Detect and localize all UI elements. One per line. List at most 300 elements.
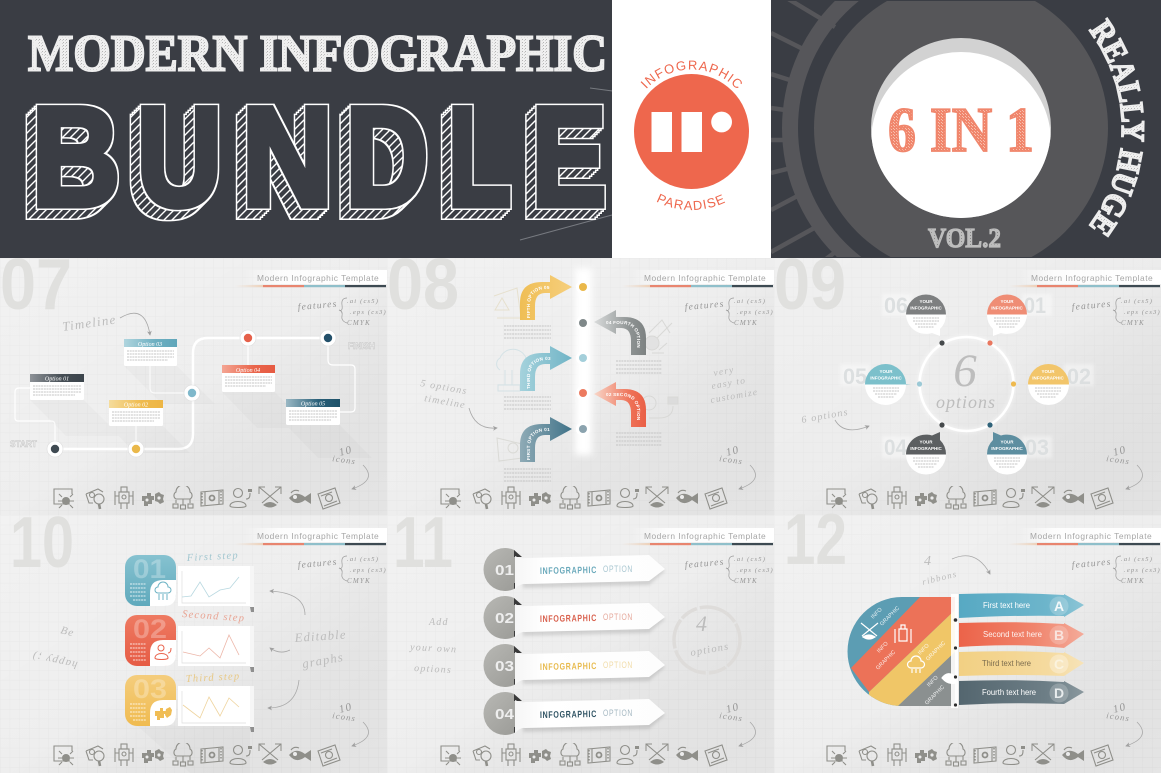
- icon row: [54, 485, 340, 509]
- note: graphs: graphs: [301, 650, 345, 671]
- long shadow: [125, 715, 250, 773]
- bubble: 01: YOUR: [1000, 299, 1014, 304]
- node: option 01: [576, 422, 590, 436]
- label: finish: FINISH: [348, 341, 375, 351]
- features note: .ai (cs5): [1121, 556, 1153, 563]
- option 01: OPTION: [603, 564, 633, 575]
- step 3 graph: [178, 686, 254, 732]
- features note: features: [297, 299, 338, 313]
- panel: 11 four options: [387, 503, 774, 773]
- icon: photo: [318, 745, 340, 766]
- outer ring: [782, 1, 861, 257]
- label: vol 2: VOL.2: [928, 223, 1001, 253]
- heading: bundle letters: [32, 78, 606, 235]
- features note: [684, 556, 774, 585]
- icon: crossed arrows: [259, 487, 281, 508]
- option 02: [484, 596, 665, 639]
- white divider: [951, 594, 958, 708]
- heading: bundle letters: L: [448, 78, 511, 235]
- icon: cloud network: [173, 485, 193, 509]
- note: add your own options: Add: [428, 617, 449, 628]
- step 2 card: 02: [133, 614, 167, 644]
- header: [622, 528, 774, 545]
- bubble: 05: YOUR: [879, 369, 893, 374]
- stamp: 4 options: options: [690, 641, 730, 659]
- ring text: options: options: [936, 392, 996, 412]
- icon: fish: [289, 747, 311, 761]
- note: 10 icons: [719, 701, 744, 723]
- rays: [771, 0, 838, 262]
- text placeholder blocks: [504, 326, 662, 481]
- bubble: 04: YOUR: [919, 440, 933, 444]
- arrow: to icons: [1126, 722, 1142, 746]
- header: [1009, 270, 1161, 287]
- ribbon D: Fourth text here: [982, 688, 1036, 697]
- note: 10 icons: [1106, 444, 1131, 466]
- icon: photo: [705, 745, 727, 766]
- card: option 05: [286, 399, 340, 425]
- ribbon D: [959, 680, 1084, 705]
- step 1 card: [125, 554, 176, 606]
- slide number: 10: [10, 503, 74, 583]
- note: 4 ribbons: ribbons: [921, 569, 958, 587]
- icon: robot: [888, 487, 906, 509]
- note: 5 options timeline: [419, 378, 468, 411]
- icon: robot: [115, 744, 133, 766]
- icon: crossed arrows: [646, 744, 668, 764]
- note: timeline: Timeline: [61, 312, 117, 334]
- segment labels: GRAPHIC: [879, 605, 901, 627]
- arrow: graph 3: [268, 680, 299, 708]
- node: option 04: [576, 316, 590, 330]
- heading: bundle letters: D: [346, 78, 428, 235]
- icon: person plug: [1003, 488, 1025, 508]
- option 04: [484, 692, 665, 735]
- icon row: [54, 742, 340, 766]
- header: [235, 528, 387, 545]
- option 03: INFOGRAPHIC: [540, 661, 597, 673]
- step 3 card: [125, 674, 176, 726]
- note: happy: happy ;): [31, 649, 79, 671]
- icon: person plug: [617, 488, 639, 508]
- icon: crossed arrows: [1032, 487, 1054, 508]
- label: first step: First step: [186, 550, 239, 564]
- option 04: INFOGRAPHIC: [540, 709, 597, 721]
- icon: film: [588, 490, 610, 506]
- option 04: OPTION: [603, 708, 633, 719]
- segment labels: INFO: [870, 606, 884, 620]
- features note: [1071, 556, 1161, 585]
- note: editable: Editable: [293, 627, 347, 645]
- icon: cloud network: [560, 742, 580, 766]
- header: [235, 270, 387, 287]
- node: option 05: [576, 280, 590, 294]
- note: 10 icons: [332, 444, 357, 466]
- arrow: fifth option: FIFTH OPTION 05: [526, 286, 550, 318]
- option 01: [484, 548, 665, 591]
- features note: .ai (cs5): [734, 298, 766, 305]
- features note: .eps (cs3): [350, 309, 387, 316]
- stamp: 4 options: 4: [696, 611, 708, 636]
- segment labels: GRAPHIC: [924, 684, 946, 706]
- header: Modern Infographic Template: [1030, 531, 1153, 541]
- icon: spider screen: [827, 489, 847, 508]
- note: add your own options: your own: [409, 642, 457, 655]
- slide number: 09: [774, 245, 846, 325]
- card: option 03: [124, 339, 177, 366]
- icon: film: [201, 747, 223, 763]
- bubble: 01: 01: [1024, 293, 1046, 318]
- icon: person plug: [230, 746, 252, 764]
- ribbon D: D: [1054, 685, 1064, 701]
- ribbon B: Second text here: [983, 630, 1042, 639]
- icon: fish: [1062, 490, 1084, 504]
- segment labels: GRAPHIC: [925, 640, 947, 662]
- timeline path: [15, 338, 355, 449]
- segment labels: INFO: [926, 674, 940, 688]
- features note: .eps (cs3): [1124, 309, 1161, 316]
- note: 10 icons: icons: [332, 710, 357, 723]
- features note: CMYK: [734, 319, 758, 327]
- panel: 08 arrows: [387, 245, 774, 515]
- features note: .eps (cs3): [737, 309, 774, 316]
- arrow: timeline: [120, 313, 150, 335]
- features note: features: [1071, 299, 1112, 313]
- icon: camera: [859, 489, 877, 509]
- arrow: third option: THIRD OPTION 03: [526, 356, 550, 389]
- icon: photo: [318, 488, 340, 509]
- note: add your own options: options: [414, 663, 452, 676]
- bubble: 04: 04: [884, 435, 908, 460]
- features note: .ai (cs5): [1121, 298, 1153, 305]
- ribbon C: [959, 651, 1084, 676]
- icon: spider screen: [54, 746, 74, 765]
- icon: puzzle: [529, 749, 551, 763]
- ribbon A: [959, 593, 1084, 618]
- heading: bundle letters: U: [137, 78, 222, 235]
- ring text: 6: 6: [953, 345, 977, 397]
- note: 10 icons: 10: [1112, 444, 1128, 459]
- note: 6 options: 6 options: [801, 407, 850, 426]
- ribbon C: C: [1054, 656, 1064, 672]
- bubble: 06: 06: [884, 293, 908, 318]
- features note: .ai (cs5): [347, 298, 379, 305]
- long shadows: [30, 366, 372, 458]
- bubble: 03: [987, 432, 1052, 474]
- ring nodes: [917, 340, 1016, 428]
- arrow: graph 1: [270, 591, 305, 615]
- icon: puzzle: [142, 749, 164, 763]
- arrow: ribbons: [952, 556, 990, 574]
- icon row: [827, 485, 1113, 509]
- option 01: INFOGRAPHIC: [540, 565, 597, 577]
- arrow: second option: 02 SECOND OPTION: [606, 392, 640, 420]
- header: Modern Infographic Template: [644, 531, 767, 541]
- note: 10 icons: [332, 701, 357, 723]
- panel: 10 steps with graphs: [0, 503, 387, 773]
- features note: features: [684, 299, 725, 313]
- arrow: to icons: [352, 465, 368, 489]
- node: option 02: [576, 386, 590, 400]
- panel: 07 timeline: [0, 245, 387, 515]
- arrow: third option: [520, 346, 572, 391]
- icon: photo: [705, 488, 727, 509]
- icon: camera: [86, 489, 104, 509]
- note: 10 icons: icons: [332, 453, 357, 466]
- icon: spider screen: [441, 746, 461, 765]
- icon: film: [974, 747, 996, 763]
- step 3 card: 03: [133, 674, 167, 704]
- hole with crescent: [871, 38, 1051, 232]
- icon row: [827, 742, 1113, 766]
- icon: fish: [289, 490, 311, 504]
- inner ring: [814, 0, 1108, 275]
- features note: .eps (cs3): [350, 567, 387, 574]
- icon: puzzle: [915, 749, 937, 763]
- pill chart: [848, 597, 955, 706]
- features note: features: [684, 557, 725, 571]
- icon: spider screen: [441, 489, 461, 508]
- bubble: 01: [987, 293, 1052, 336]
- icon row: [441, 485, 727, 509]
- arrow: to icons: [1126, 465, 1142, 489]
- features note: CMYK: [734, 577, 758, 585]
- icon: photo: [1091, 488, 1113, 509]
- card: option 04: Option 04: [236, 367, 260, 374]
- arrow: 6 options: [835, 420, 869, 430]
- slide number: 11: [393, 503, 453, 583]
- panel: brand logo: [612, 0, 771, 258]
- icon: person plug: [230, 488, 252, 508]
- features note: features: [1071, 557, 1112, 571]
- features note: .ai (cs5): [347, 556, 379, 563]
- ribbon A: First text here: [983, 601, 1030, 610]
- ribbon A: A: [1054, 598, 1064, 614]
- heading: bundle letters: N: [242, 78, 333, 235]
- stamp: 4 options: [674, 607, 740, 673]
- icon: puzzle: [529, 492, 551, 506]
- step 1 graph: [178, 566, 254, 612]
- icon: cloud network: [173, 742, 193, 766]
- icon: person plug: [617, 746, 639, 764]
- header: [622, 270, 774, 287]
- arrow: to icons: [739, 465, 755, 489]
- arrow: first option: FIRST OPTION 01: [526, 428, 550, 460]
- curved text: really huge: REALLY HUGE: [1088, 17, 1145, 238]
- option 04: 04: [495, 706, 515, 723]
- features note: CMYK: [347, 577, 371, 585]
- logo text: paradise: PARADISE: [656, 194, 725, 210]
- header: Modern Infographic Template: [644, 273, 767, 283]
- logo text: infographic: INFOGRAPHIC: [640, 60, 742, 88]
- bubble: 05: INFOGRAPHIC: [870, 376, 903, 380]
- label: second step: Second step: [182, 609, 245, 624]
- note: easy to customize: customize: [710, 388, 759, 406]
- bubble: 05: 05: [843, 364, 867, 389]
- step 2 graph: [178, 626, 254, 672]
- header: Modern Infographic Template: [257, 531, 380, 541]
- icon: spider screen: [54, 489, 74, 508]
- option 03: 03: [495, 658, 514, 675]
- features note: features: [297, 557, 338, 571]
- bubble: 04: INFOGRAPHIC: [910, 446, 943, 451]
- bubble: 02: [1020, 364, 1094, 405]
- bubble: 06: INFOGRAPHIC: [910, 306, 943, 310]
- icon: cloud network: [946, 742, 966, 766]
- panel: 12 ribbons: [774, 500, 1161, 773]
- bubble: 02: YOUR: [1041, 369, 1055, 374]
- note: 10 icons: icons: [1106, 710, 1131, 723]
- note: easy to customize: easy to: [711, 376, 747, 392]
- icon: robot: [115, 487, 133, 509]
- arrow: fourth option: [594, 310, 646, 355]
- option 03: [484, 644, 665, 687]
- icon: puzzle: [142, 492, 164, 506]
- note: 10 icons: 10: [725, 444, 741, 459]
- note: 10 icons: [719, 444, 744, 466]
- panel: 09 six options: [774, 245, 1161, 515]
- option 01: 01: [495, 562, 514, 579]
- note: 10 icons: icons: [719, 710, 744, 723]
- icon: robot: [502, 744, 520, 766]
- bubble: 03: YOUR: [1000, 440, 1014, 444]
- bubble: 02: INFOGRAPHIC: [1032, 376, 1065, 380]
- step 1 card: 01: [133, 554, 166, 584]
- icon: person plug: [1003, 746, 1025, 764]
- header: [1009, 528, 1161, 545]
- faint icon: triangle sketch: [494, 288, 521, 318]
- icon row: [441, 742, 727, 766]
- node: option 03: [184, 385, 200, 401]
- node: option 02: [128, 441, 144, 457]
- icon: crossed arrows: [646, 487, 668, 508]
- card: option 01: [30, 374, 84, 400]
- option 02: INFOGRAPHIC: [540, 613, 597, 625]
- icon: camera: [473, 489, 491, 509]
- icon: fish: [1062, 747, 1084, 761]
- panel: title banner: [0, 0, 620, 258]
- note: easy to customize: very: [713, 365, 735, 379]
- note: 10 icons: 10: [338, 701, 354, 716]
- icon: puzzle: [915, 492, 937, 506]
- ribbon C: Third text here: [982, 659, 1031, 668]
- features note: .eps (cs3): [1124, 567, 1161, 574]
- arrow: second option: [594, 382, 646, 427]
- icon: robot: [888, 744, 906, 766]
- icon: fish: [676, 490, 698, 504]
- arrow: fourth option: 04 FOURTH OPTION: [606, 320, 640, 348]
- badge text: 6 in 1: 6 IN 1: [888, 95, 1034, 165]
- note: 10 icons: 10: [725, 701, 741, 716]
- card: option 04: [222, 365, 275, 392]
- heading: bundle letters: E: [532, 78, 606, 235]
- arrow: to icons: [739, 722, 755, 746]
- note: 10 icons: 10: [1112, 701, 1128, 716]
- arrow: graph 2: [270, 648, 290, 652]
- bubble: 04: [882, 432, 946, 474]
- note: 10 icons: [1106, 701, 1131, 723]
- features note: .ai (cs5): [734, 556, 766, 563]
- bubble: 03: 03: [1025, 435, 1049, 460]
- note: add your own options: [409, 617, 457, 676]
- icon: photo: [1091, 745, 1113, 766]
- ribbon B: [959, 622, 1084, 648]
- note: 10 icons: icons: [1106, 453, 1131, 466]
- features note: [297, 556, 387, 585]
- arrow: fifth option: [520, 275, 572, 320]
- logo disc: [634, 74, 749, 189]
- icon: film: [588, 747, 610, 763]
- icon: cloud network: [560, 485, 580, 509]
- ribbon pins: [954, 618, 957, 707]
- bubble: 06: [882, 293, 946, 336]
- header: Modern Infographic Template: [257, 273, 380, 283]
- icon: crossed arrows: [259, 744, 281, 764]
- icon: camera: [859, 746, 877, 766]
- node: finish: [320, 330, 336, 346]
- features note: CMYK: [1121, 577, 1145, 585]
- bubble: 02: 02: [1067, 364, 1091, 389]
- faint icon: plug: [642, 396, 678, 418]
- title: modern infographic: MODERN INFOGRAPHIC: [28, 26, 607, 82]
- features note: CMYK: [347, 319, 371, 327]
- icon: film: [201, 490, 223, 506]
- note: easy to customize: [710, 365, 759, 406]
- node: option 04: [240, 330, 256, 346]
- features note: .eps (cs3): [737, 567, 774, 574]
- icon: camera: [473, 746, 491, 766]
- header: Modern Infographic Template: [1031, 273, 1154, 283]
- arrow: to icons: [352, 722, 368, 746]
- segment labels: INFO: [876, 640, 890, 654]
- card: option 03: Option 03: [138, 342, 162, 348]
- bubble: 03: INFOGRAPHIC: [991, 446, 1024, 451]
- option 02: OPTION: [603, 612, 633, 623]
- bubble: 01: INFOGRAPHIC: [991, 306, 1024, 310]
- icon: cloud network: [946, 485, 966, 509]
- note: 4 ribbons: [921, 554, 958, 587]
- step 2 card: [125, 614, 176, 666]
- arrow: to timeline: [469, 408, 497, 428]
- features note: [297, 298, 387, 327]
- label: start: START: [10, 439, 37, 449]
- faint icon: cloud: [497, 349, 526, 391]
- icon: fish: [676, 747, 698, 761]
- slide number: 12: [784, 500, 847, 580]
- faint icon: film: [497, 438, 522, 461]
- heading: bundle letters: B: [32, 78, 120, 235]
- option 03: OPTION: [603, 660, 633, 671]
- center ring: [920, 337, 1014, 431]
- note: 10 icons: 10: [338, 444, 354, 459]
- segment icons: [861, 623, 956, 683]
- node: option 03: [576, 351, 590, 365]
- note: 10 icons: icons: [719, 453, 744, 466]
- segment labels: [870, 605, 947, 706]
- ribbon B: B: [1054, 627, 1064, 643]
- segment labels: GRAPHIC: [875, 649, 897, 671]
- option 02: 02: [495, 610, 514, 627]
- icon: spider screen: [827, 746, 847, 765]
- icon: robot: [502, 487, 520, 509]
- segment labels: INFO: [917, 642, 931, 656]
- features note: [1071, 298, 1161, 327]
- slide number: 08: [387, 245, 459, 325]
- icon: crossed arrows: [1032, 744, 1054, 764]
- bubble: 05: [840, 364, 912, 405]
- note: 4 ribbons: 4: [924, 554, 932, 569]
- icon: film: [974, 490, 996, 506]
